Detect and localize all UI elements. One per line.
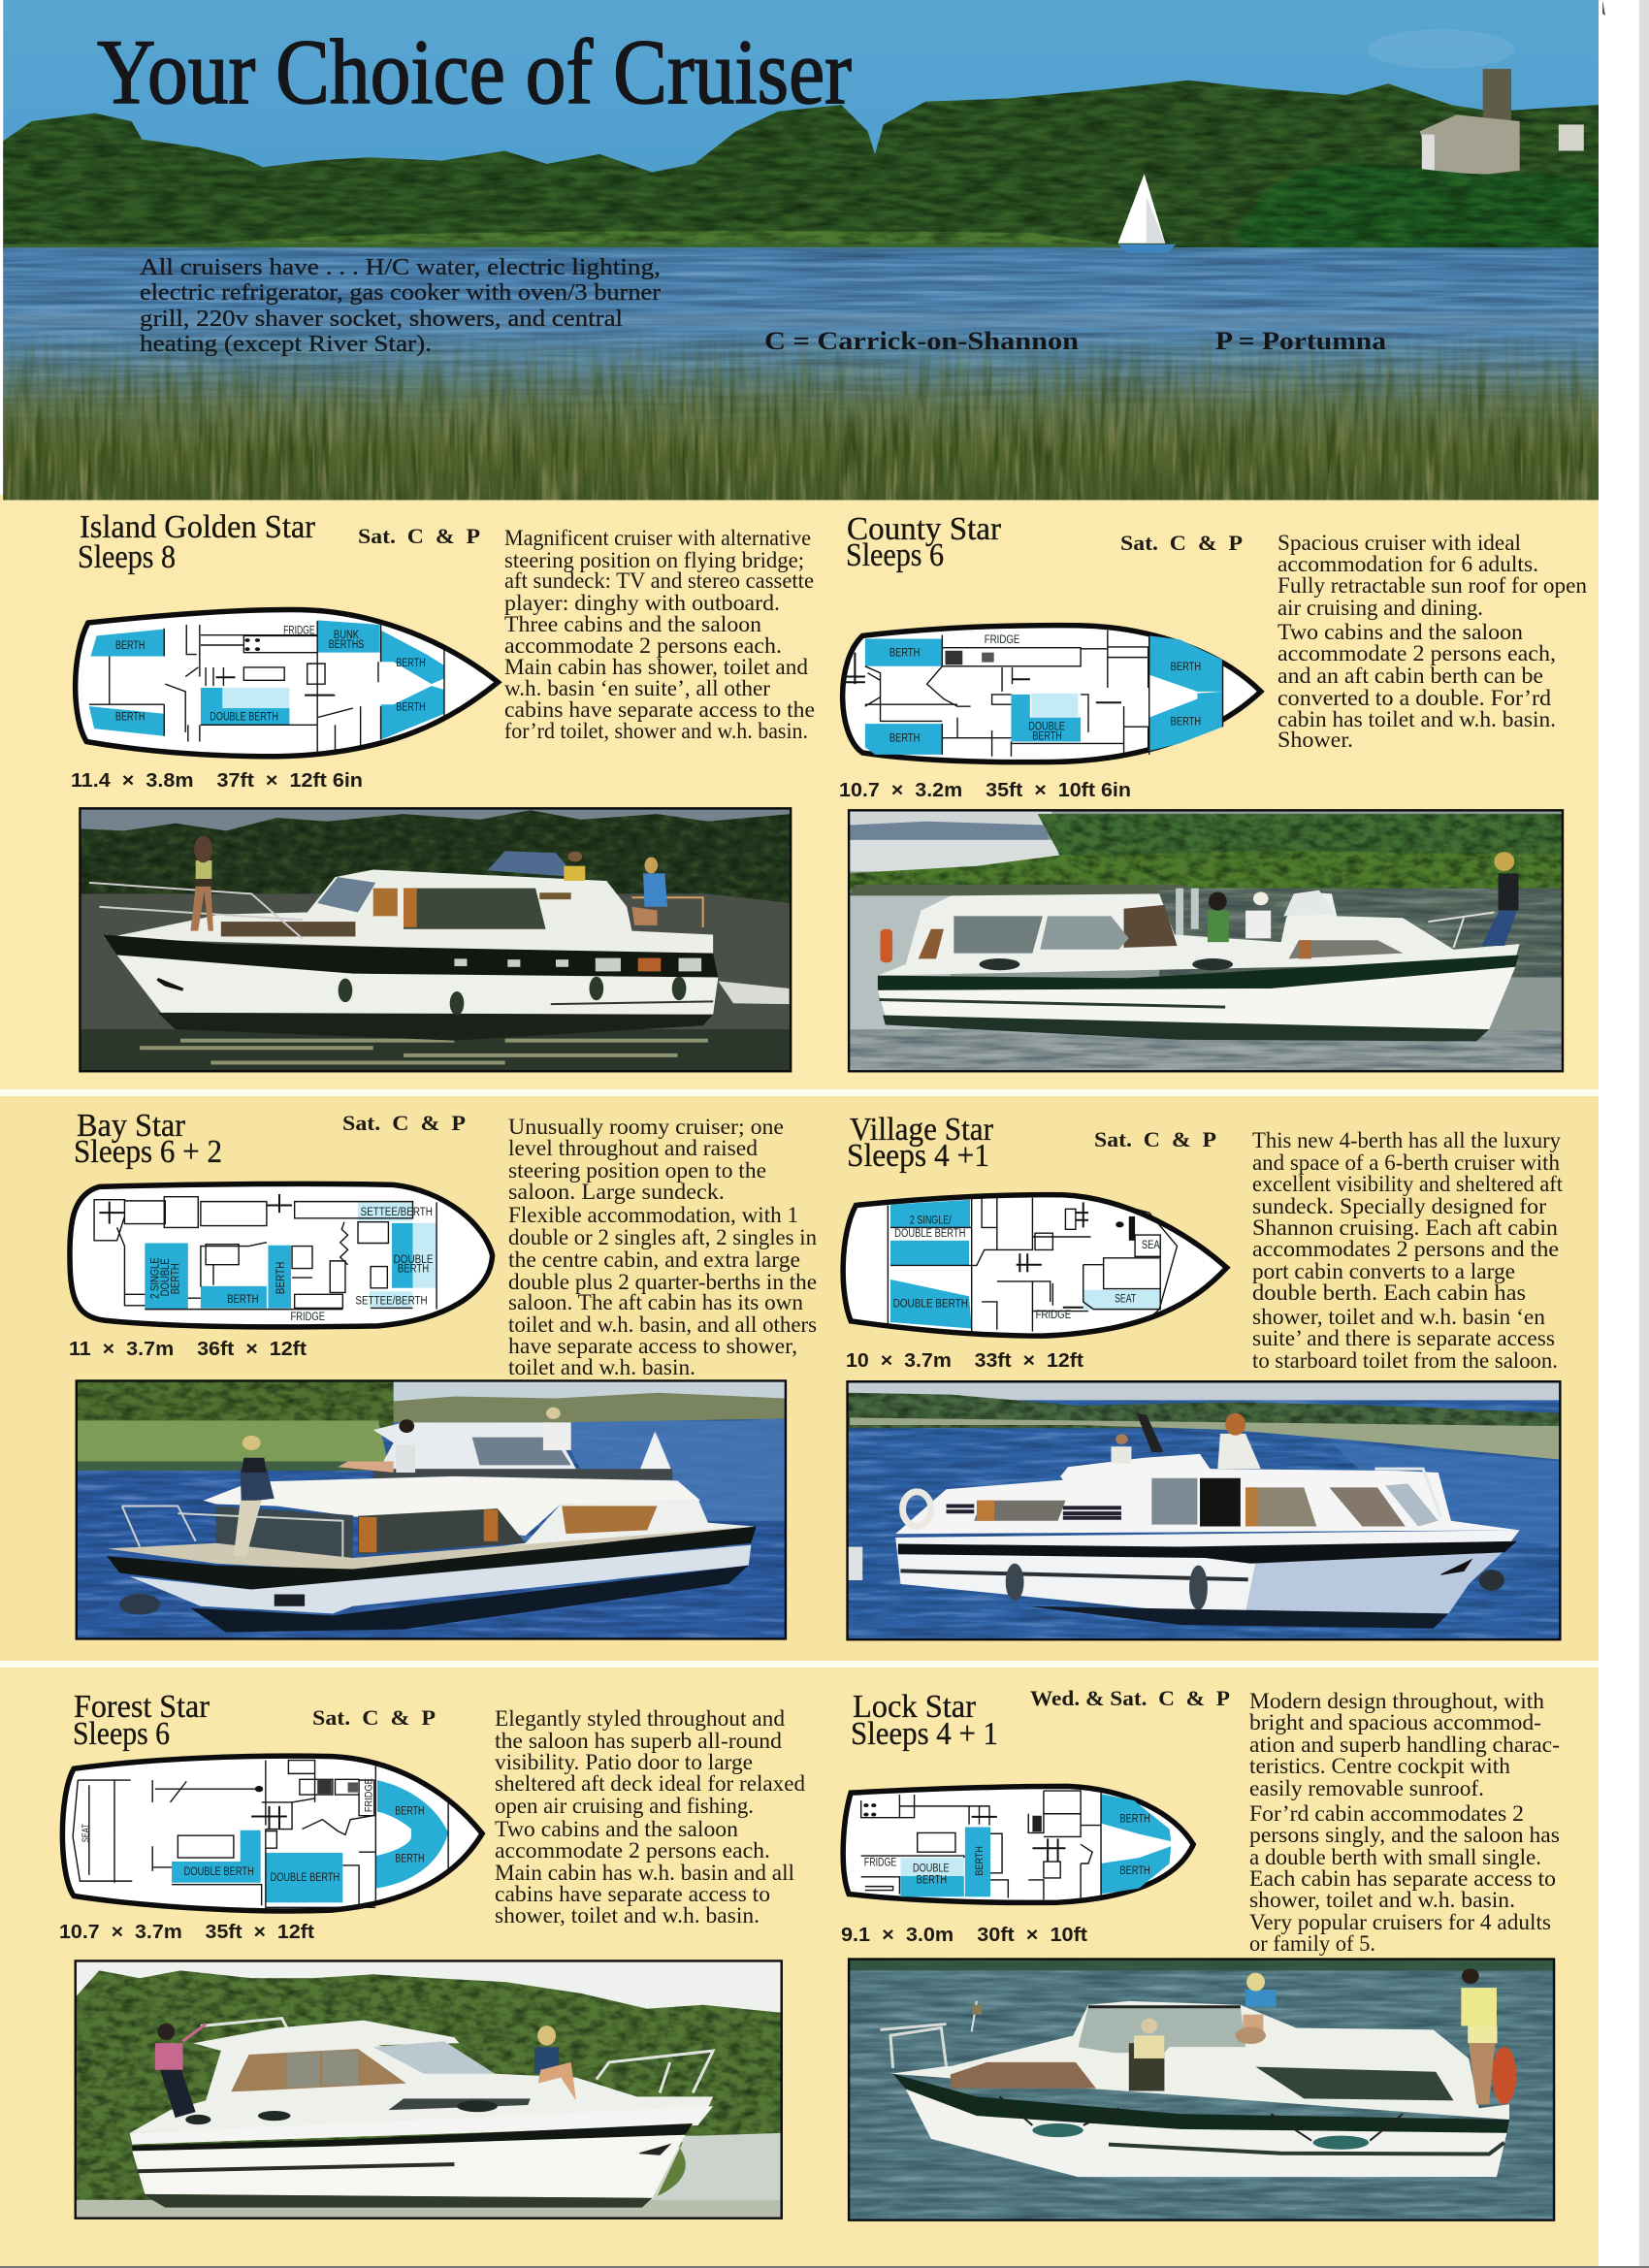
deck plan bbox=[70, 1183, 493, 1327]
dimensions: 10.7 × 3.7m 35ft × 12ft bbox=[59, 1922, 314, 1943]
deck plan bbox=[842, 626, 1261, 762]
panel: County Star bbox=[839, 511, 1587, 1071]
deck plan: BERTH bbox=[396, 700, 426, 714]
deck plan: BERTH bbox=[1119, 1812, 1150, 1826]
deck plan: 2 SINGLE/ bbox=[910, 1215, 952, 1227]
description: Very popular cruisers for 4 adults bbox=[1249, 1910, 1551, 1934]
description: and space of a 6-berth cruiser with bbox=[1252, 1150, 1560, 1175]
description: Flexible accommodation, with 1 bbox=[508, 1203, 798, 1227]
description: shower, toilet and w.h. basin. bbox=[495, 1903, 760, 1928]
deck plan: BERTH bbox=[1119, 1864, 1150, 1877]
description: double berth. Each cabin has bbox=[1252, 1280, 1526, 1305]
description: easily removable sunroof. bbox=[1249, 1776, 1484, 1800]
heading: Village Star: Sleeps 4 +1 bbox=[847, 1138, 989, 1174]
deck plan: BERTH bbox=[974, 1846, 986, 1876]
heading: Island Golden Star bbox=[78, 509, 316, 575]
description: sundeck. Specially designed for bbox=[1252, 1194, 1546, 1218]
description: cabins have separate access to bbox=[495, 1882, 770, 1906]
description: bright and spacious accommod- bbox=[1249, 1710, 1541, 1734]
description: accommodate 2 persons each. bbox=[504, 633, 782, 658]
deck plan: BERTH bbox=[395, 1852, 425, 1865]
castle bbox=[1420, 69, 1584, 180]
deck plan: BERTH bbox=[889, 731, 920, 745]
deck plan: FRIDGE bbox=[290, 1311, 325, 1323]
description: the centre cabin, and extra large bbox=[508, 1247, 800, 1272]
photo: Forest Star cruiser bbox=[76, 1960, 782, 2219]
panel: Village Star bbox=[843, 1112, 1564, 1639]
description: suite’ and there is separate access bbox=[1252, 1326, 1555, 1350]
heading: Lock Star: Lock Star bbox=[853, 1689, 977, 1725]
deck plan: DOUBLE BERTH bbox=[893, 1297, 968, 1311]
description: shower, toilet and w.h. basin ‘en bbox=[1252, 1305, 1545, 1329]
description: Shannon cruising. Each aft cabin bbox=[1252, 1215, 1559, 1240]
description: saloon. Large sundeck. bbox=[508, 1180, 725, 1204]
description: or family of 5. bbox=[1249, 1931, 1375, 1956]
description: toilet and w.h. basin, and all others bbox=[508, 1312, 817, 1337]
heading: Bay Star: Sleeps 6 + 2 bbox=[74, 1134, 222, 1170]
description: Two cabins and the saloon bbox=[495, 1817, 739, 1841]
description: converted to a double. For’rd bbox=[1277, 686, 1552, 710]
text block: all cruisers have: All cruisers have . . . H/C water, electric lighting, bbox=[140, 255, 661, 280]
description bbox=[1249, 1689, 1560, 1956]
photo: Lock Star cruiser bbox=[849, 1960, 1554, 2220]
schedule: Wed. & Sat. C & P bbox=[1030, 1686, 1230, 1710]
deck plan: BERTH bbox=[115, 639, 145, 652]
schedule: Sat. C & P bbox=[312, 1705, 436, 1730]
deck plan: BUNK bbox=[334, 629, 359, 641]
deck plan: BERTH bbox=[227, 1293, 259, 1306]
deck plan: BERTH bbox=[169, 1263, 182, 1294]
title: Your Choice of Cruiser bbox=[97, 20, 852, 123]
deck plan: SETTEE/BERTH bbox=[355, 1294, 428, 1308]
text block: all cruisers have bbox=[140, 255, 661, 357]
description: Magnificent cruiser with alternative bbox=[504, 526, 811, 550]
text block: all cruisers have: grill, 220v shaver socket, showers, and central bbox=[140, 307, 623, 332]
deck plan: SEAT bbox=[1115, 1293, 1136, 1306]
description: This new 4-berth has all the luxury bbox=[1252, 1128, 1561, 1152]
hero photo: lake with sailboat and castle bbox=[3, 0, 1599, 500]
description: accommodate 2 persons each. bbox=[495, 1838, 770, 1863]
heading: County Star bbox=[846, 511, 1002, 573]
description: steering position open to the bbox=[508, 1158, 766, 1183]
panel: Island Golden Star bbox=[71, 509, 815, 1071]
description: w.h. basin ‘en suite’, all other bbox=[504, 676, 770, 700]
deck plan bbox=[62, 1756, 482, 1911]
deck plan: DOUBLE bbox=[1028, 721, 1065, 733]
treeline bbox=[3, 81, 1599, 252]
description: Three cabins and the saloon bbox=[504, 612, 762, 636]
description: for’rd toilet, shower and w.h. basin. bbox=[504, 719, 808, 743]
photo: County Star cruiser bbox=[849, 810, 1563, 1071]
description: level throughout and raised bbox=[508, 1136, 759, 1160]
deck plan: FRIDGE bbox=[985, 633, 1019, 646]
description: accommodation for 6 adults. bbox=[1277, 552, 1538, 576]
description: shower, toilet and w.h. basin. bbox=[1249, 1888, 1515, 1912]
deck plan: BERTH bbox=[917, 1873, 947, 1887]
description: double or 2 singles aft, 2 singles in bbox=[508, 1225, 817, 1249]
deck plan: DOUBLE bbox=[913, 1862, 950, 1875]
deck plan: SEAT bbox=[80, 1824, 91, 1842]
description: persons singly, and the saloon has bbox=[1249, 1823, 1560, 1847]
heading: Bay Star: Bay Star bbox=[77, 1108, 186, 1144]
deck plan: BERTH bbox=[889, 646, 920, 660]
description: saloon. The aft cabin has its own bbox=[508, 1290, 803, 1314]
deck plan: 2 SINGLE bbox=[148, 1257, 162, 1299]
description: Two cabins and the saloon bbox=[1277, 620, 1524, 644]
description: Main cabin has w.h. basin and all bbox=[495, 1861, 794, 1885]
schedule: Sat. C & P bbox=[358, 524, 480, 548]
heading: Forest Star: Sleeps 6 bbox=[73, 1716, 170, 1752]
heading: Forest Star bbox=[73, 1689, 210, 1752]
description: Modern design throughout, with bbox=[1249, 1689, 1545, 1713]
description: Each cabin has separate access to bbox=[1249, 1866, 1556, 1891]
description: accommodates 2 persons and the bbox=[1252, 1237, 1559, 1261]
description: double plus 2 quarter-berths in the bbox=[508, 1270, 817, 1294]
dimensions: 10.7 × 3.2m 35ft × 10ft 6in bbox=[839, 780, 1131, 801]
deck plan bbox=[843, 1195, 1227, 1336]
reeds bbox=[3, 328, 1599, 500]
description: sheltered aft deck ideal for relaxed bbox=[495, 1771, 805, 1796]
description: Main cabin has shower, toilet and bbox=[504, 655, 808, 679]
description: port cabin converts to a large bbox=[1252, 1259, 1515, 1283]
deck plan: DOUBLE bbox=[159, 1258, 172, 1296]
heading: Village Star: Village Star bbox=[850, 1112, 994, 1148]
description: player: dinghy with outboard. bbox=[504, 591, 780, 615]
deck plan: FRIDGE bbox=[864, 1856, 896, 1869]
heading: County Star: County Star bbox=[847, 511, 1002, 547]
photo: Village Star cruiser bbox=[848, 1381, 1560, 1639]
deck plan: SETTEE/BERTH bbox=[361, 1206, 433, 1218]
description: Shower. bbox=[1277, 728, 1353, 752]
deck plan: BERTH bbox=[398, 1263, 429, 1276]
deck plan: DOUBLE bbox=[394, 1253, 433, 1267]
deck plan: FRIDGE bbox=[1036, 1309, 1071, 1322]
description: toilet and w.h. basin. bbox=[508, 1355, 695, 1379]
deck plan: FRIDGE bbox=[283, 624, 315, 637]
deck plan: DOUBLE BERTH bbox=[894, 1227, 965, 1240]
description: Spacious cruiser with ideal bbox=[1277, 531, 1521, 555]
description: cabins have separate access to the bbox=[504, 697, 815, 722]
heading: County Star: Sleeps 6 bbox=[846, 537, 944, 573]
heading: Lock Star bbox=[851, 1689, 998, 1752]
description bbox=[1277, 531, 1587, 752]
description: teristics. Centre cockpit with bbox=[1249, 1754, 1511, 1778]
description: accommodate 2 persons each, bbox=[1277, 641, 1556, 665]
description bbox=[508, 1115, 817, 1379]
description: air cruising and dining. bbox=[1277, 596, 1483, 620]
description: visibility. Patio door to large bbox=[495, 1750, 753, 1774]
deck plan: BERTHS bbox=[329, 638, 364, 651]
deck plan: BERTH bbox=[395, 1804, 425, 1818]
panel: Lock Star bbox=[841, 1686, 1560, 2220]
description: Unusually roomy cruiser; one bbox=[508, 1115, 784, 1139]
deck plan: BERTH bbox=[275, 1262, 287, 1294]
dimensions: 11.4 × 3.8m 37ft × 12ft 6in bbox=[71, 770, 363, 792]
schedule: Sat. C & P bbox=[1120, 531, 1243, 555]
text block: all cruisers have: electric refrigerator, gas cooker with oven/3 burner bbox=[140, 280, 661, 306]
panel: Bay Star bbox=[69, 1108, 817, 1638]
description: Fully retractable sun roof for open bbox=[1277, 573, 1587, 598]
description bbox=[504, 526, 815, 743]
schedule: Sat. C & P bbox=[1094, 1127, 1216, 1151]
dimensions: 10 × 3.7m 33ft × 12ft bbox=[846, 1350, 1083, 1372]
description: cabin has toilet and w.h. basin. bbox=[1277, 707, 1556, 731]
photo: Bay Star cruiser bbox=[77, 1380, 786, 1638]
description: have separate access to shower, bbox=[508, 1334, 797, 1358]
description: open air cruising and fishing. bbox=[495, 1794, 754, 1818]
legend: Portumna: P = Portumna bbox=[1215, 327, 1386, 355]
icon: sailboat bbox=[1118, 174, 1176, 253]
deck plan bbox=[76, 610, 498, 757]
deck plan: BERTH bbox=[1032, 730, 1062, 743]
description: aft sundeck: TV and stereo cassette bbox=[504, 568, 814, 593]
dimensions: 11 × 3.7m 36ft × 12ft bbox=[69, 1339, 307, 1360]
heading: Village Star bbox=[847, 1112, 994, 1174]
deck plan: DOUBLE BERTH bbox=[210, 710, 278, 724]
photo: Island Golden Star cruiser bbox=[80, 808, 791, 1071]
description: the saloon has superb all-round bbox=[495, 1729, 783, 1753]
deck plan: BERTH bbox=[115, 710, 145, 724]
description: Elegantly styled throughout and bbox=[495, 1706, 785, 1731]
deck plan: DOUBLE BERTH bbox=[271, 1871, 340, 1885]
description: and an aft cabin berth can be bbox=[1277, 664, 1543, 688]
deck plan: BERTH bbox=[396, 657, 426, 670]
description: steering position on flying bridge; bbox=[504, 548, 804, 572]
description bbox=[495, 1706, 805, 1928]
description: to starboard toilet from the saloon. bbox=[1252, 1348, 1558, 1373]
description bbox=[1252, 1128, 1564, 1373]
description: For’rd cabin accommodates 2 bbox=[1249, 1801, 1524, 1826]
deck plan: DOUBLE BERTH bbox=[184, 1865, 254, 1878]
heading: Bay Star bbox=[74, 1108, 222, 1170]
panel: Forest Star bbox=[59, 1689, 805, 2219]
heading: Forest Star: Forest Star bbox=[74, 1689, 210, 1725]
description: ation and superb handling charac- bbox=[1249, 1733, 1560, 1757]
heading: Island Golden Star: Island Golden Star bbox=[80, 509, 316, 545]
description: a double berth with small single. bbox=[1249, 1845, 1541, 1869]
deck plan: BERTH bbox=[1171, 661, 1201, 673]
heading: Island Golden Star: Sleeps 8 bbox=[78, 539, 176, 575]
dimensions: 9.1 × 3.0m 30ft × 10ft bbox=[841, 1925, 1087, 1946]
text block: all cruisers have: heating (except River Star). bbox=[140, 332, 432, 357]
legend: Carrick-on-Shannon: C = Carrick-on-Shannon bbox=[764, 327, 1080, 355]
deck plan bbox=[843, 1786, 1193, 1902]
heading: Lock Star: Sleeps 4 + 1 bbox=[851, 1716, 998, 1752]
schedule: Sat. C & P bbox=[342, 1111, 466, 1135]
deck plan: FRIDGE bbox=[364, 1778, 375, 1812]
deck plan: SEA bbox=[1142, 1239, 1160, 1251]
water bbox=[3, 247, 1599, 458]
deck plan: BERTH bbox=[1171, 715, 1201, 729]
description: excellent visibility and sheltered aft bbox=[1252, 1172, 1564, 1196]
